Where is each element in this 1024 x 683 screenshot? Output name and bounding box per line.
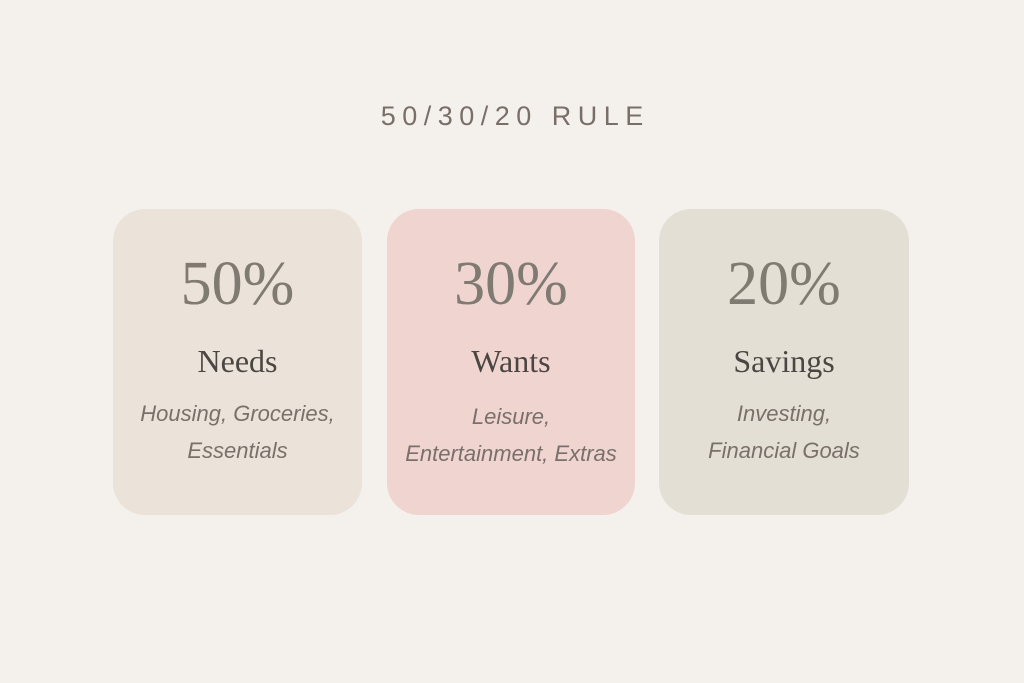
panel: needs xyxy=(113,209,362,515)
description: needs: Essentials xyxy=(187,438,288,463)
description: wants: Leisure, xyxy=(472,404,550,429)
description: savings: Financial Goals xyxy=(708,438,860,463)
percentage: 30%: 30% xyxy=(454,250,568,318)
description: wants xyxy=(405,404,617,466)
heading: wants: Wants xyxy=(471,343,551,379)
panel: wants xyxy=(387,209,635,515)
description: savings: Investing, xyxy=(737,401,831,426)
description: needs: Housing, Groceries, xyxy=(140,401,335,426)
percentage: 50%: 50% xyxy=(181,250,294,318)
heading: needs: Needs xyxy=(198,343,277,379)
description: wants: Entertainment, Extras xyxy=(405,441,617,466)
title: 50/30/20 RULE xyxy=(381,101,650,131)
heading: savings: Savings xyxy=(733,343,835,379)
description: needs xyxy=(140,401,335,463)
percentage: 20%: 20% xyxy=(727,250,841,318)
panel: savings xyxy=(659,209,909,515)
description: savings xyxy=(708,401,860,463)
